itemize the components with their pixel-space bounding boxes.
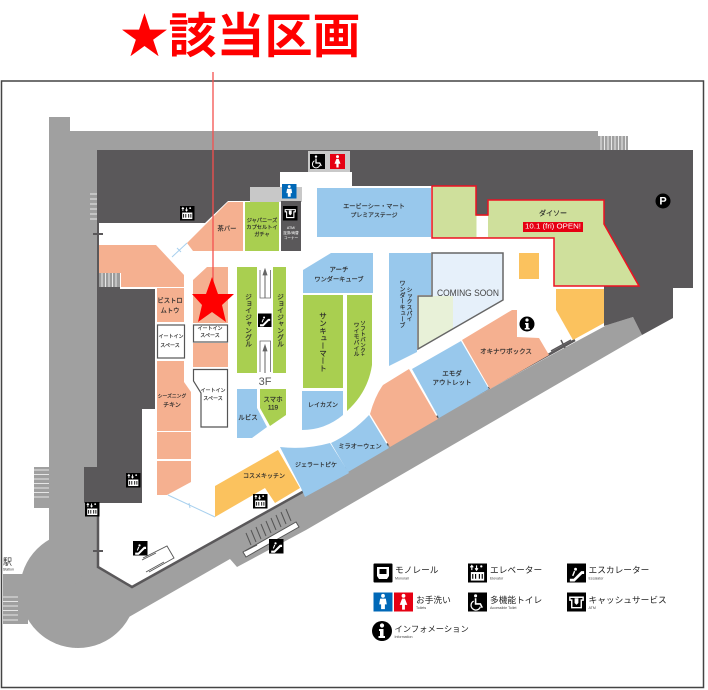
shop: エモダ	[412, 341, 489, 418]
shop: レイカズン	[302, 391, 343, 430]
icon: elevator south	[253, 494, 268, 508]
shop: オキナワボックス	[462, 310, 549, 389]
legend: escalator: エスカレーター	[588, 565, 649, 575]
stairs left wall	[90, 194, 97, 219]
store labels: ワンダーキューブ	[398, 280, 405, 328]
Daiso open badge: 10.1 (fri) OPEN!	[525, 224, 581, 231]
store labels: スペース	[200, 333, 220, 339]
toilet alcove	[308, 151, 350, 172]
salmon shops	[99, 202, 549, 495]
lower centre escalator	[243, 522, 299, 557]
store labels: チキン	[163, 402, 181, 409]
legend: information: Information	[394, 635, 412, 639]
store labels: ワイモバイル	[352, 322, 359, 357]
store labels: ワンダーキューブ	[314, 276, 364, 284]
icon: escalator southwest	[133, 541, 148, 556]
legend: ATM: キャッシュサービス	[588, 595, 667, 605]
shop: ミラオーウェン	[331, 415, 389, 472]
eat-in left	[158, 325, 184, 358]
legend: escalator	[567, 564, 649, 582]
store labels: プレミアステージ	[350, 212, 398, 219]
legend: accessible toilet: 多機能トイレ	[490, 594, 542, 605]
shop: below eat-in	[193, 343, 228, 367]
ATM corner label	[283, 226, 299, 240]
shop: lower right orange	[556, 289, 604, 340]
centre escalator up top	[260, 269, 270, 298]
shop: サンキューマート	[303, 295, 343, 388]
store labels: スマホ	[263, 396, 283, 404]
Daiso open badge	[523, 222, 583, 232]
station label	[3, 557, 14, 572]
shop: target	[193, 267, 228, 323]
store labels: オキナワボックス	[480, 348, 532, 356]
store labels: スペース	[160, 343, 180, 349]
shop: ビストロムトウ	[157, 288, 184, 322]
legend: monorail: モノレール	[395, 565, 439, 575]
white floor	[98, 172, 604, 587]
store labels: ジョイジャングル	[276, 293, 284, 348]
target leader line	[212, 72, 214, 285]
legend: escalator: Escalator	[588, 576, 604, 580]
legend: information: インフォメーション	[394, 624, 469, 634]
eat-in centre	[194, 325, 228, 342]
shop: unnamed central	[370, 369, 438, 447]
store labels: エモダ	[442, 368, 462, 378]
icon: blue toilet	[282, 184, 296, 198]
wall line	[98, 340, 575, 587]
shop: シーズニングチキン	[157, 361, 191, 431]
store labels: スペース	[203, 396, 223, 402]
stairs top right	[598, 136, 628, 152]
station stem	[3, 574, 28, 624]
shop: ジョイジャングル left	[237, 267, 257, 373]
store labels: ダイソー	[539, 208, 567, 218]
walkway diagonal	[60, 317, 642, 648]
shop: 茶バー	[187, 202, 243, 251]
legend: toilets: Toilets	[416, 606, 426, 610]
outer walkway	[49, 117, 598, 575]
store labels: シックスパイ	[405, 287, 412, 322]
icon: ATM	[283, 206, 298, 220]
legend: monorail: Monorail	[395, 576, 409, 580]
shop: ルビス	[237, 389, 267, 438]
legend: elevator: Elevator	[490, 576, 504, 580]
icon: wheelchair toilet	[310, 154, 325, 169]
lower centre stairs	[242, 507, 297, 548]
wall tick	[93, 550, 103, 552]
stairs left upper	[34, 467, 50, 508]
shop: コスメキッチン	[215, 450, 300, 517]
legend: toilets: お手洗い	[416, 594, 451, 605]
shop: ジェラートピケ	[280, 443, 349, 497]
entrance line bottom	[168, 495, 215, 517]
icon: parking: P	[659, 196, 667, 208]
store labels: カプセルトイ	[246, 224, 278, 231]
eat-in space boxes	[158, 325, 228, 427]
Daiso outlined area	[432, 186, 639, 286]
shop: アーチ	[303, 253, 373, 293]
legend: information	[372, 621, 469, 641]
stairs left lower	[3, 593, 18, 624]
legend: ATM: ATM	[588, 606, 596, 610]
shop: エービーシーマート	[317, 188, 431, 237]
title: ★該当区画	[120, 10, 361, 64]
icon: information	[520, 316, 534, 332]
legend: ATM	[567, 592, 667, 612]
icon: escalator centre	[258, 314, 272, 327]
building structure	[3, 117, 693, 648]
legend	[372, 564, 667, 641]
store labels: サンキューマート	[318, 312, 328, 372]
target star	[192, 277, 234, 322]
icon: elevator west	[126, 473, 140, 488]
store labels: ジョイジャングル	[244, 293, 252, 348]
store labels: イートイン	[200, 388, 226, 394]
store labels: ジャパニーズ	[247, 216, 277, 224]
shop: スマホ119	[260, 389, 286, 426]
car park dark block	[84, 150, 693, 503]
store labels: ガチャ	[254, 230, 270, 238]
store labels: ルビス	[238, 412, 258, 422]
lower left escalator	[142, 546, 174, 572]
shop: ジャパニーズカプセルトイ	[245, 202, 279, 251]
entrance line top	[172, 243, 187, 257]
store labels: ジェラートピケ	[295, 462, 337, 469]
store labels: ミラオーウェン	[338, 442, 382, 450]
store labels: イートイン	[158, 334, 184, 340]
store labels: 茶バー	[218, 224, 236, 232]
shop: ジョイジャングル right	[273, 267, 286, 373]
icon: red toilet	[330, 154, 345, 169]
legend: toilets	[374, 592, 451, 612]
ATM corner	[281, 201, 301, 251]
shop: シックスパイ	[389, 253, 431, 366]
store labels: レイカズン	[308, 401, 338, 409]
store labels: アウトレット	[432, 378, 472, 386]
Daiso gap	[476, 216, 488, 237]
store labels	[157, 202, 567, 480]
icon: escalator south	[269, 539, 284, 554]
service alcove	[250, 187, 302, 202]
coming soon block	[418, 253, 503, 349]
icon: elevator southwest	[85, 502, 100, 516]
store labels: 119	[268, 404, 279, 412]
shop: ソフトバンク	[347, 295, 372, 411]
legend: accessible toilet: Accessible Toilet	[490, 606, 517, 610]
store labels: イートイン	[197, 326, 223, 332]
shop: small orange	[519, 253, 539, 279]
centre escalator up bottom	[260, 341, 270, 373]
ATM corner label: コーナー	[284, 235, 299, 240]
shop: seasoning bottom	[157, 461, 191, 495]
store labels: シーズニング	[158, 392, 186, 400]
eat-in lower	[194, 370, 228, 427]
store labels: コスメキッチン	[243, 473, 285, 480]
icon: elevator north	[180, 206, 194, 220]
shop: seasoning lower	[157, 432, 191, 459]
station label: Station	[3, 568, 14, 572]
green shops	[237, 202, 372, 426]
blue shops	[237, 188, 489, 497]
legend: monorail	[374, 564, 439, 582]
legend: elevator: エレベーター	[490, 565, 542, 575]
store labels: エービーシー・マート	[343, 202, 405, 210]
icon: parking	[656, 194, 670, 208]
legend: elevator	[468, 564, 542, 582]
store labels: ムトウ	[161, 306, 179, 314]
legend: accessible toilet	[468, 592, 542, 612]
orange shops	[215, 253, 604, 517]
store labels: ソフトバンク+	[359, 320, 366, 356]
store labels: ビストロ	[157, 296, 183, 304]
ATM corner label: ATM/	[287, 226, 295, 230]
floor label 3F: 3F	[259, 376, 272, 388]
stairs by left corner shop	[99, 273, 120, 287]
station label: 駅	[3, 557, 12, 567]
ATM corner label: 証券/両替	[283, 230, 299, 235]
wall tick left	[93, 233, 103, 235]
wall tick right	[551, 340, 571, 351]
coming soon block: COMING SOON	[437, 288, 499, 298]
monorail walkway circle	[20, 532, 136, 648]
store labels: アーチ	[329, 266, 349, 274]
shop: left corner	[99, 245, 184, 287]
